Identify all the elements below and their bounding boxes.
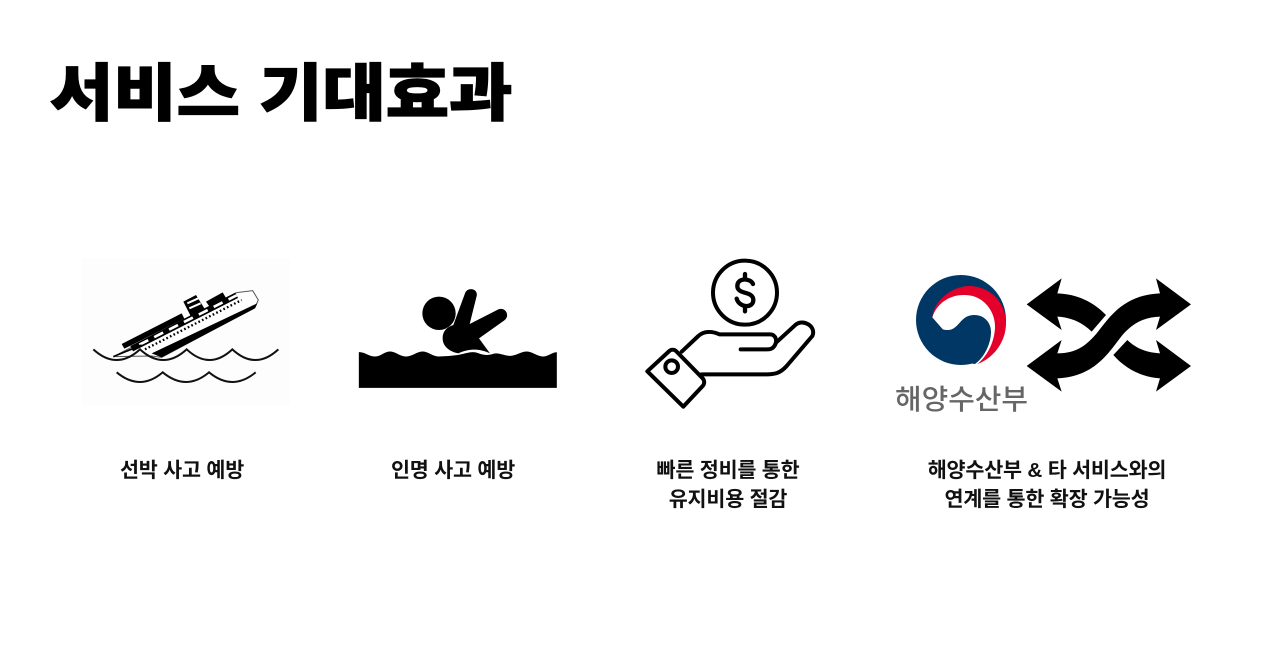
icon: drowning person [358, 289, 557, 388]
icon: ministry of oceans logo [916, 275, 1006, 365]
icon: hand holding coin [647, 261, 813, 407]
icon: sinking ship [82, 258, 290, 405]
label: service expansion: 연계를 통한 확장 가능성 [944, 488, 1149, 511]
label: maintenance cost saving: 유지비용 절감 [669, 488, 787, 511]
logo wordmark: 해양수산부 [895, 384, 1028, 415]
label: life accident prevention: 인명 사고 예방 [391, 459, 515, 482]
label: maintenance cost saving: 빠른 정비를 통한 [657, 459, 799, 482]
title: 서비스 기대효과 [50, 60, 512, 129]
label: service expansion [928, 459, 1166, 511]
icon: crossing arrows [1027, 278, 1191, 392]
label: service expansion: 해양수산부 & 타 서비스와의 [928, 459, 1166, 482]
label: ship accident prevention: 선박 사고 예방 [120, 459, 244, 482]
label: maintenance cost saving [657, 459, 800, 511]
